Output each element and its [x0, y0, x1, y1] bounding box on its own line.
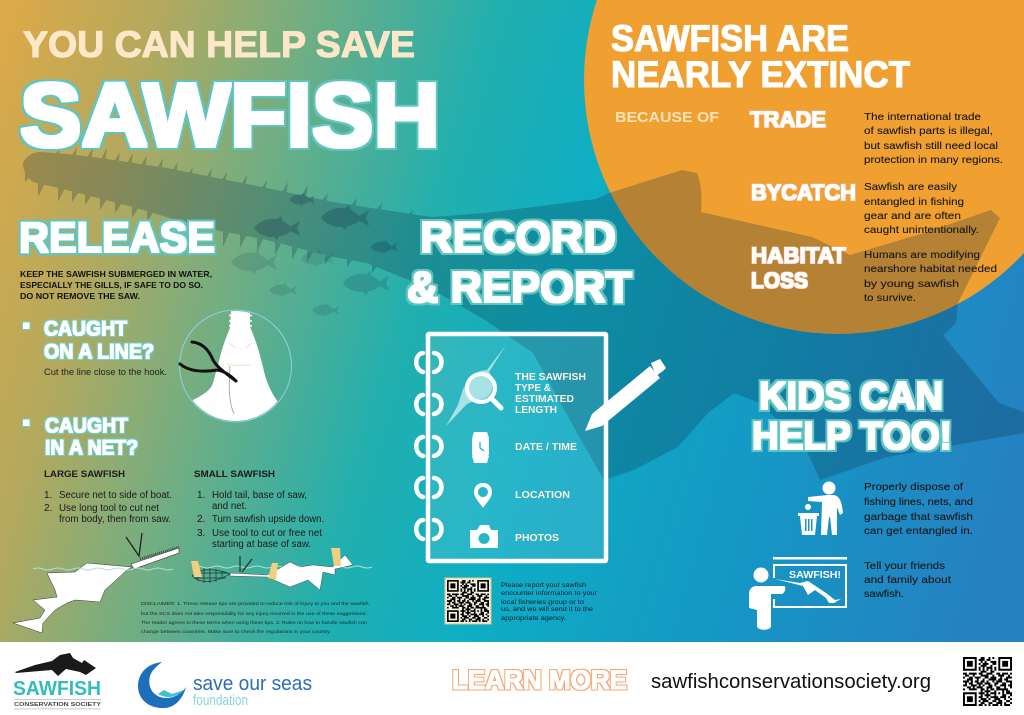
text: tell friends and family: Tell your friends: [864, 560, 945, 572]
threat: habitat loss: HABITAT: [751, 243, 847, 268]
title: SAWFISH: [20, 66, 440, 166]
small sawfish steps: Hold tail, base of saw,: [212, 490, 307, 501]
report instructions: [501, 582, 598, 622]
disclaimer: The reader agrees to these terms when using these tips. 2. Rules on how to handle sawfish can: [141, 620, 367, 626]
threat: trade: but sawfish still need local: [864, 140, 998, 152]
text: dispose of fishing lines: garbage that sawfish: [864, 511, 973, 523]
threat: habitat loss: LOSS: [751, 268, 808, 293]
report QR code: [445, 578, 491, 624]
illustration: small sawfish freed from net: [191, 548, 372, 590]
heading: record and report: [407, 213, 632, 312]
logo: save our seas foundation: [138, 662, 312, 709]
icon: watch: [472, 432, 489, 463]
footer QR code: [963, 658, 1012, 705]
logo: sawfish conservation society: SAWFISH: [13, 678, 101, 700]
text: sawfish type and length: LENGTH: [515, 405, 557, 416]
sawfish silhouette: [23, 147, 1024, 480]
illustration: large sawfish cut from net: [13, 533, 179, 633]
small sawfish steps: SMALL SAWFISH: [194, 469, 275, 480]
text: dispose of fishing lines: can get entangled in.: [864, 525, 973, 537]
panel: release: [13, 214, 372, 635]
panel: nearly extinct: [611, 18, 1003, 304]
threat: bycatch: entangled in fishing: [864, 196, 964, 208]
disclaimer: but the SCS does not take responsibility for any injury incurred in the use of these suggestions.: [141, 611, 367, 617]
icon: camera: [470, 525, 498, 548]
heading: caught on a line: [44, 318, 154, 364]
bullet: caught on a line: [22, 322, 30, 330]
small sawfish steps: Use tool to cut or free net: [212, 528, 322, 539]
small sawfish steps: [194, 469, 324, 550]
small sawfish steps: starting at base of saw.: [212, 539, 311, 550]
release instructions: KEEP THE SAWFISH SUBMERGED IN WATER,: [20, 269, 212, 279]
text: date and time: DATE / TIME: [515, 442, 577, 453]
text: photos: PHOTOS: [515, 533, 559, 544]
threat: trade: protection in many regions.: [864, 154, 1003, 166]
text: sawfish type and length: [515, 372, 586, 416]
threat: habitat loss: nearshore habitat needed: [864, 263, 997, 275]
report instructions: appropriate agency.: [501, 615, 566, 622]
label: because of: BECAUSE OF: [615, 109, 719, 126]
shoal of fish shadows: [231, 193, 398, 317]
large sawfish steps: 1.: [44, 490, 52, 501]
threat: trade: The international trade: [864, 111, 981, 123]
heading: kids can help too: [752, 375, 952, 458]
disclaimer: [141, 601, 370, 635]
icon: person pointing at sawfish board: SAWFISH!: [789, 570, 841, 581]
small sawfish steps: Turn sawfish upside down.: [212, 514, 324, 525]
threat: habitat loss: [751, 243, 997, 304]
heading: caught on a line: ON A LINE?: [44, 340, 154, 364]
title: [20, 24, 440, 166]
icon: pencil: [585, 359, 666, 431]
icon: location pin: [474, 483, 492, 508]
release instructions: DO NOT REMOVE THE SAW.: [20, 291, 140, 301]
icon: sawfish under magnifier: [446, 345, 506, 426]
large sawfish steps: Secure net to side of boat.: [59, 490, 172, 501]
heading: record and report: & REPORT: [407, 263, 632, 312]
threat: trade: of sawfish parts is illegal,: [864, 125, 993, 137]
text: tell friends and family: [864, 560, 951, 600]
logo: sawfish conservation society: CONSERVATION SOCIETY: [14, 702, 101, 708]
heading: kids can help too: KIDS CAN: [759, 375, 943, 418]
learn more: LEARN MORE: [452, 665, 627, 695]
threat: bycatch: caught unintentionally.: [864, 224, 979, 236]
panel: kids can help too: [749, 375, 973, 630]
disclaimer: change between countries. Make sure to check the regulations in your country.: [141, 629, 331, 635]
small sawfish steps: and net.: [212, 501, 247, 512]
text: tell friends and family: and family about: [864, 574, 951, 586]
icon: person pointing at sawfish board: [749, 557, 847, 630]
heading: kids can help too: HELP TOO!: [752, 415, 952, 458]
panel: orange extinction circle: [584, 0, 1024, 334]
threat: trade: [750, 107, 1003, 166]
report instructions: us, and we will send it to the: [501, 606, 593, 613]
disclaimer: DISCLAIMER: 1. These release tips are provided to reduce risk of injury to you and the sawfish,: [141, 601, 370, 607]
logo: save our seas foundation: save our seas: [193, 673, 312, 695]
heading: nearly extinct: [611, 18, 910, 95]
text: sawfish type and length: THE SAWFISH: [515, 372, 586, 383]
release instructions: ESPECIALLY THE GILLS, IF SAFE TO DO SO.: [20, 280, 203, 290]
threat: habitat loss: Humans are modifying: [864, 249, 980, 261]
bullet: caught in a net: [22, 419, 30, 426]
illustration: pliers on hooked sawfish: [180, 310, 292, 430]
text: location: LOCATION: [515, 490, 570, 501]
threat: bycatch: [751, 180, 979, 236]
text: dispose of fishing lines: fishing lines, nets, and: [864, 496, 973, 508]
logo: save our seas foundation: foundation: [193, 692, 248, 709]
small sawfish steps: 2.: [197, 514, 205, 525]
large sawfish steps: Use long tool to cut net: [59, 503, 159, 514]
large sawfish steps: LARGE SAWFISH: [44, 469, 125, 480]
heading: caught in a net: [45, 414, 138, 460]
heading: caught in a net: CAUGHT: [45, 414, 128, 438]
heading: caught on a line: CAUGHT: [44, 318, 127, 340]
small sawfish steps: 3.: [197, 528, 205, 539]
large sawfish steps: 2.: [44, 503, 52, 514]
threat: bycatch: BYCATCH: [751, 180, 856, 205]
text: sawfish type and length: TYPE &: [515, 383, 551, 394]
heading: record and report: RECORD: [420, 213, 616, 262]
report instructions: Please report your sawfish: [501, 582, 586, 589]
line instruction: Cut the line close to the hook.: [44, 367, 167, 378]
title: YOU CAN HELP SAVE: [23, 24, 415, 65]
report instructions: encounter information to your: [501, 590, 598, 597]
large sawfish steps: from body, then from saw.: [59, 514, 171, 525]
threat: bycatch: gear and are often: [864, 210, 961, 222]
text: dispose of fishing lines: Properly dispose of: [864, 481, 963, 493]
large sawfish steps: [44, 469, 172, 525]
notebook: [416, 334, 606, 561]
release instructions: [20, 269, 212, 301]
website url: sawfishconservationsociety.org: [651, 671, 931, 693]
report instructions: local fisheries group or to: [501, 599, 584, 606]
heading: release: RELEASE: [19, 214, 215, 262]
text: tell friends and family: sawfish.: [864, 588, 904, 600]
heading: caught in a net: IN A NET?: [45, 436, 138, 460]
threat: bycatch: Sawfish are easily: [864, 181, 958, 193]
panel: record and report: [407, 213, 666, 624]
threat: habitat loss: by young sawfish: [864, 278, 959, 290]
icon: person using trash can: [798, 482, 843, 535]
heading: nearly extinct: SAWFISH ARE: [611, 18, 849, 59]
threat: habitat loss: to survive.: [864, 292, 916, 304]
text: sawfish type and length: ESTIMATED: [515, 394, 574, 405]
footer band: [0, 642, 1024, 715]
small sawfish steps: 1.: [197, 490, 205, 501]
threat: trade: TRADE: [750, 107, 826, 132]
heading: nearly extinct: NEARLY EXTINCT: [611, 54, 910, 95]
text: dispose of fishing lines: [864, 481, 973, 537]
logo: sawfish conservation society: [13, 653, 101, 709]
